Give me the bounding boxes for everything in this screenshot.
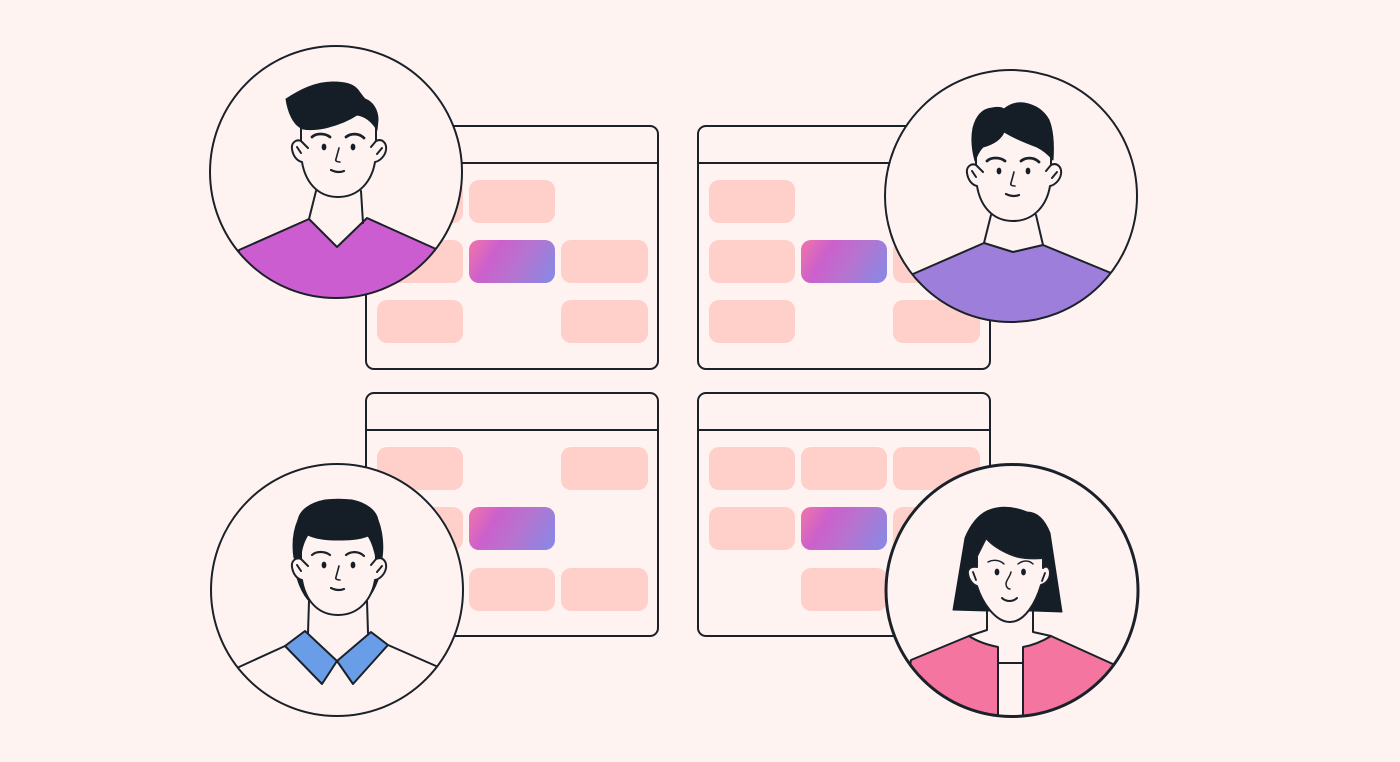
avatar: man with short hair and blue collar: [211, 464, 463, 716]
avatar: man with parted hair in purple shirt: [885, 70, 1137, 335]
panel: bottom-left schedule: [366, 393, 658, 636]
avatar: man with swept hair in magenta shirt: [210, 46, 462, 310]
panel: top-left schedule: [366, 126, 658, 369]
avatar: woman with bob hair in pink jacket: [886, 464, 1138, 725]
panel: top-right schedule: [698, 126, 990, 369]
panel: bottom-right schedule: [698, 393, 990, 636]
